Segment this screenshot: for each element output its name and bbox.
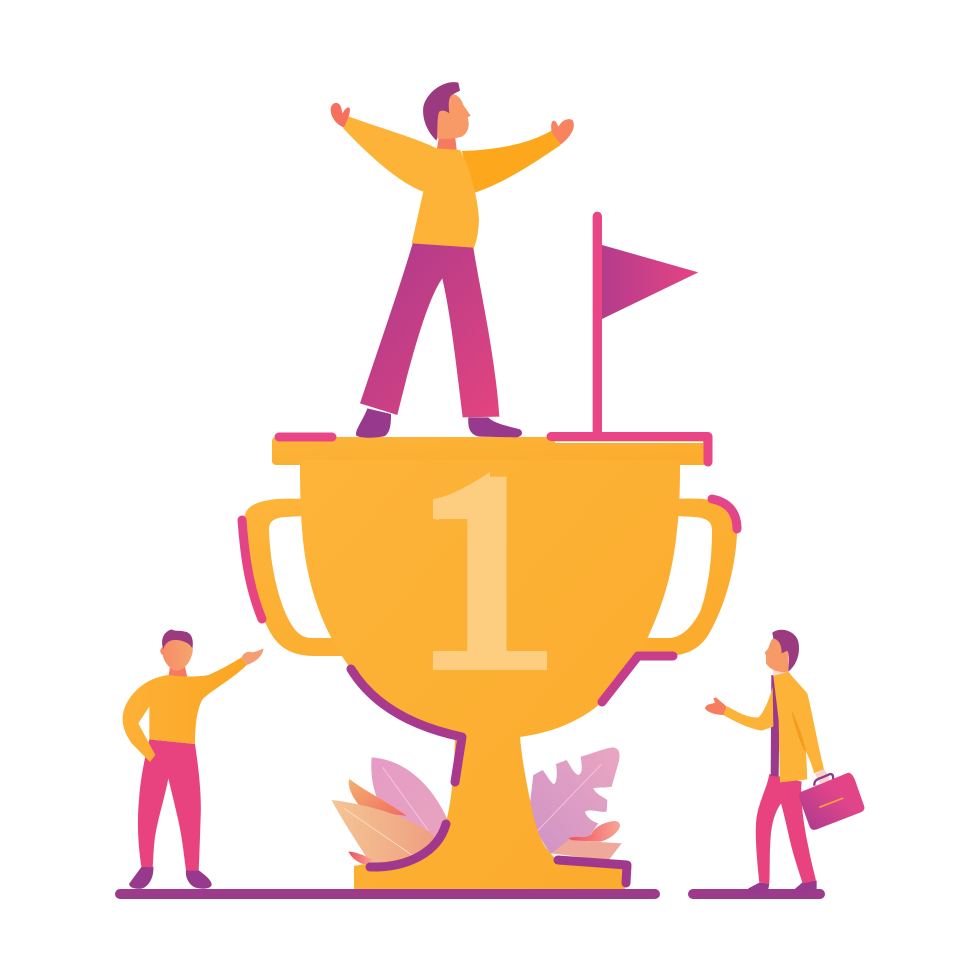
arm reaching [723,687,773,731]
hair [423,82,460,141]
neck [168,667,187,677]
plants behind trophy [332,747,622,865]
leaf: monstera [530,747,620,855]
accent: base right [558,860,627,883]
hand [705,697,727,715]
accent: left handle [242,520,262,619]
hand [242,648,263,665]
shoes [129,867,212,889]
person: winner on top [331,82,574,438]
hair [162,629,193,649]
ground line: right [688,889,825,899]
person: left man [123,629,263,889]
trousers [756,774,816,883]
flag [593,212,698,438]
leaf: peach large [332,800,435,863]
briefcase body [799,773,864,830]
face [765,638,788,672]
ground line: left [115,889,660,899]
jacket [773,672,824,782]
hair [772,630,799,672]
trophy [244,409,737,889]
accent: rim right [551,436,708,462]
leaf: pink left [371,757,448,843]
flag pennant [602,245,698,319]
right arm [462,131,561,193]
shirt [771,675,780,777]
trousers [138,739,201,871]
sweater [123,657,247,762]
neck [437,135,457,150]
left hand [331,103,350,127]
fingers on handle [815,769,829,783]
person: right man with briefcase [705,630,864,895]
neck [773,670,788,678]
accent: rim left [279,432,332,442]
trophy accent strokes [242,436,737,883]
briefcase handle [814,774,833,786]
rim highlight [555,442,703,443]
face [432,93,471,139]
briefcase clasp [819,798,843,807]
flag pole [593,212,602,438]
leaf: orange narrow [349,779,407,816]
left shoe [356,408,391,438]
accent: stem left [370,824,446,867]
briefcase [799,773,864,830]
head [160,639,193,671]
accent: right handle [712,499,737,529]
right hand [551,119,574,145]
trophy bowl and stem [300,460,680,889]
shoes [748,881,817,895]
trophy handles [244,499,737,656]
trophy rim [272,437,708,465]
accent: lower right bowl [602,656,673,702]
leaf: small right peach [552,840,622,861]
number one: 1 [413,409,553,734]
torso and left arm [343,115,479,248]
right shoe [468,417,522,437]
trousers [360,243,499,417]
jacket shade [792,710,806,752]
leaf: small right red [568,821,620,842]
leaf: small red [348,852,373,865]
accent: lower left bowl [351,669,462,782]
